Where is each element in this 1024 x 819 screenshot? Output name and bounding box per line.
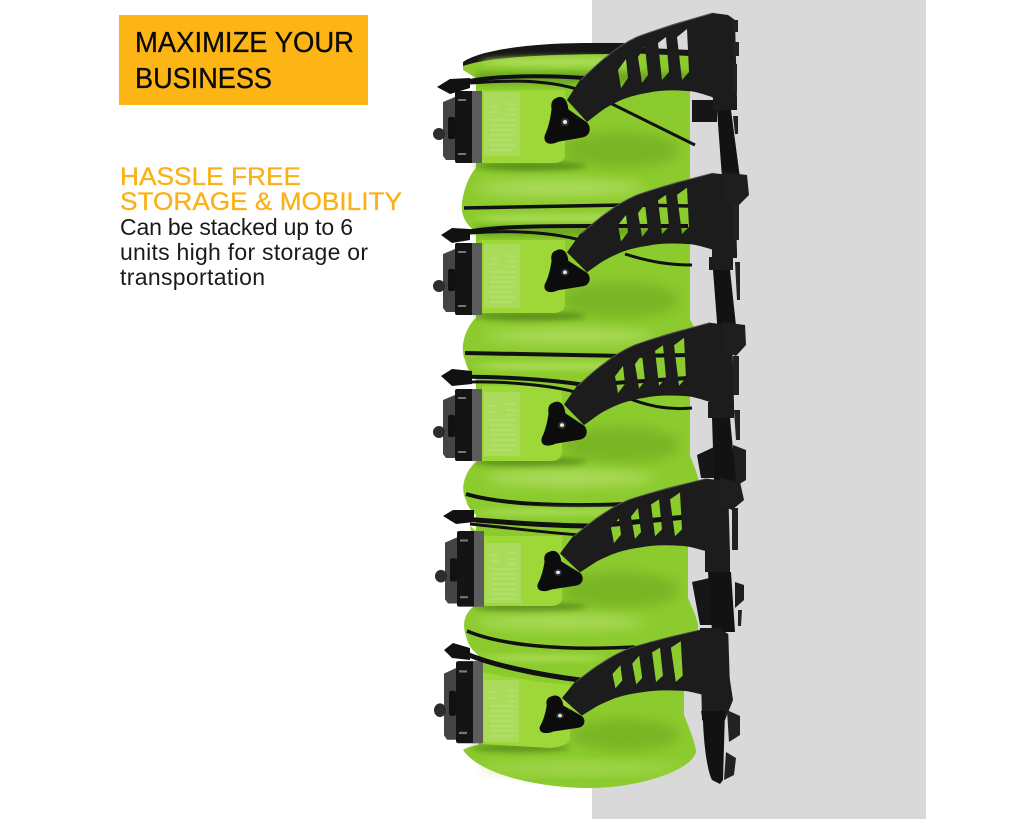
heading badge: BUSINESS (135, 63, 272, 95)
air mover unit 3 (433, 322, 746, 505)
air mover unit 2 (433, 172, 749, 356)
subheading: STORAGE & MOBILITY (120, 188, 402, 216)
green stack silhouette (462, 52, 699, 788)
subheading (120, 163, 402, 216)
air mover unit 1 (top) (433, 13, 740, 208)
heading badge (119, 15, 368, 105)
body text (120, 214, 368, 290)
body text: Can be stacked up to 6 (120, 214, 353, 240)
body text: transportation (120, 264, 265, 290)
heading badge: MAXIMIZE YOUR (135, 27, 354, 59)
body text: units high for storage or (120, 239, 368, 265)
air mover unit 4 (435, 478, 744, 648)
background wall panel (592, 0, 926, 819)
subheading: HASSLE FREE (120, 163, 301, 191)
air mover unit 5 (bottom) (434, 610, 742, 784)
